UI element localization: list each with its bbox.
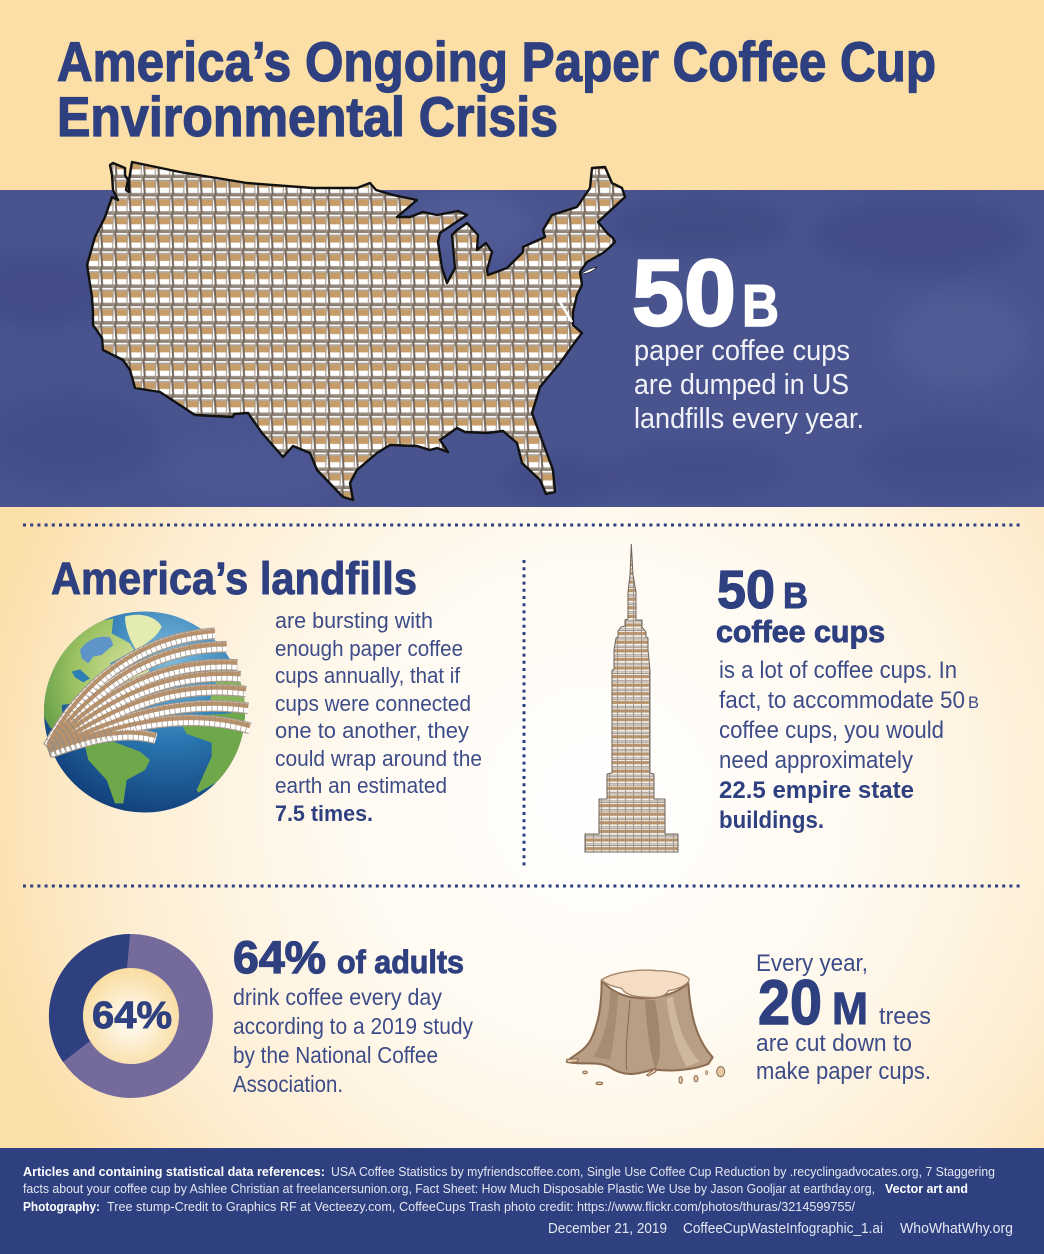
icon: globe wrapped in cups — [40, 612, 250, 812]
stat: 20M trees: Every year, — [756, 950, 868, 977]
footer credits: WhoWhatWhy.org — [900, 1220, 1013, 1237]
text: landfills paragraph: cups annually, that if — [275, 663, 461, 688]
text: adults paragraph: drink coffee every day — [233, 984, 442, 1010]
map: USA filled with coffee cups — [87, 162, 625, 500]
title — [57, 30, 936, 148]
footer references — [23, 1164, 995, 1214]
text: landfills paragraph: enough paper coffee — [275, 636, 463, 661]
heading: 50B coffee cups — [716, 560, 885, 649]
text: empire state paragraph: fact, to accommodate 50 — [719, 687, 965, 714]
cup ribbons — [48, 631, 250, 753]
heading: 64% of adults: of adults — [337, 944, 464, 980]
footer credits: December 21, 2019 — [548, 1220, 667, 1237]
text: landfills paragraph: could wrap around the — [275, 746, 482, 771]
stat: 20M trees: trees — [879, 1003, 931, 1030]
text: landfills paragraph: one to another, they — [275, 718, 469, 743]
stat: 50B paper coffee cups: 50 — [632, 240, 736, 345]
stat: 50B paper coffee cups: are dumped in US — [634, 369, 849, 401]
divider — [23, 884, 1020, 888]
heading: 50B coffee cups: B — [783, 575, 808, 616]
footer — [0, 1148, 1044, 1254]
text: empire state paragraph: 22.5 empire state — [719, 777, 914, 804]
stat: 50B paper coffee cups: landfills every year. — [634, 403, 864, 435]
title: Environmental Crisis — [57, 85, 558, 148]
text: adults paragraph: according to a 2019 study — [233, 1013, 473, 1039]
stat: 20M trees — [756, 950, 931, 1085]
text: landfills paragraph: cups were connected — [275, 691, 471, 716]
text: empire state paragraph: need approximately — [719, 747, 913, 774]
text: empire state paragraph: B — [968, 693, 979, 712]
icon: tree stump — [567, 970, 725, 1085]
footer credits — [548, 1220, 1013, 1237]
panel: blue photo band — [0, 190, 1044, 507]
stat: 50B paper coffee cups: paper coffee cups — [634, 335, 850, 367]
text: adults paragraph — [233, 984, 473, 1097]
stat: 50B paper coffee cups — [632, 240, 864, 435]
footer references: USA Coffee Statistics by myfriendscoffee.com, Single Use Coffee Cup Reduction by .recyclingadvocates.org, 7 Staggering — [331, 1164, 995, 1179]
heading: America's landfills: America’s landfills — [51, 553, 417, 604]
stat: 20M trees: make paper cups. — [756, 1058, 931, 1085]
text: empire state paragraph: is a lot of coffee cups. In — [719, 657, 957, 684]
heading: 64% of adults: 64% — [233, 932, 326, 983]
text: adults paragraph: by the National Coffee — [233, 1042, 438, 1068]
heading: 50B coffee cups: coffee cups — [716, 614, 885, 649]
heading: 64% of adults — [233, 932, 464, 983]
icon: empire state building made of cups — [585, 544, 678, 852]
footer credits: CoffeeCupWasteInfographic_1.ai — [683, 1220, 883, 1237]
text: landfills paragraph — [275, 608, 482, 826]
footer references: Vector art and — [885, 1181, 968, 1196]
footer references: Articles and containing statistical data references: — [23, 1164, 325, 1179]
text: empire state paragraph — [719, 657, 979, 834]
text: landfills paragraph: 7.5 times. — [275, 801, 373, 826]
text: landfills paragraph: are bursting with — [275, 608, 433, 633]
footer references: Photography: — [23, 1199, 100, 1214]
chart: donut 64%: 64% — [92, 995, 172, 1037]
divider — [23, 524, 1020, 526]
chart: donut 64% — [49, 934, 213, 1098]
footer references: Tree stump-Credit to Graphics RF at Vecteezy.com, CoffeeCups Trash photo credit: https://www.flickr.com/photos/thuras/3214599755/ — [107, 1199, 855, 1214]
stat: 20M trees: M — [832, 983, 868, 1034]
stat: 20M trees: 20 — [758, 968, 822, 1038]
text: empire state paragraph: buildings. — [719, 807, 824, 834]
header background — [0, 0, 1044, 190]
text: landfills paragraph: earth an estimated — [275, 773, 447, 798]
text: adults paragraph: Association. — [233, 1071, 343, 1097]
text: empire state paragraph: coffee cups, you would — [719, 717, 944, 744]
heading: 50B coffee cups: 50 — [717, 560, 775, 620]
divider — [522, 560, 526, 866]
footer references: facts about your coffee cup by Ashlee Christian at freelancersunion.org, Fact Sheet: How Much Disposable Plastic We Use by Jason Gooljar at earthday.org, — [23, 1181, 875, 1196]
stat: 20M trees: are cut down to — [756, 1030, 912, 1057]
stat: 50B paper coffee cups: B — [742, 273, 779, 339]
title: America’s Ongoing Paper Coffee Cup — [57, 30, 936, 93]
